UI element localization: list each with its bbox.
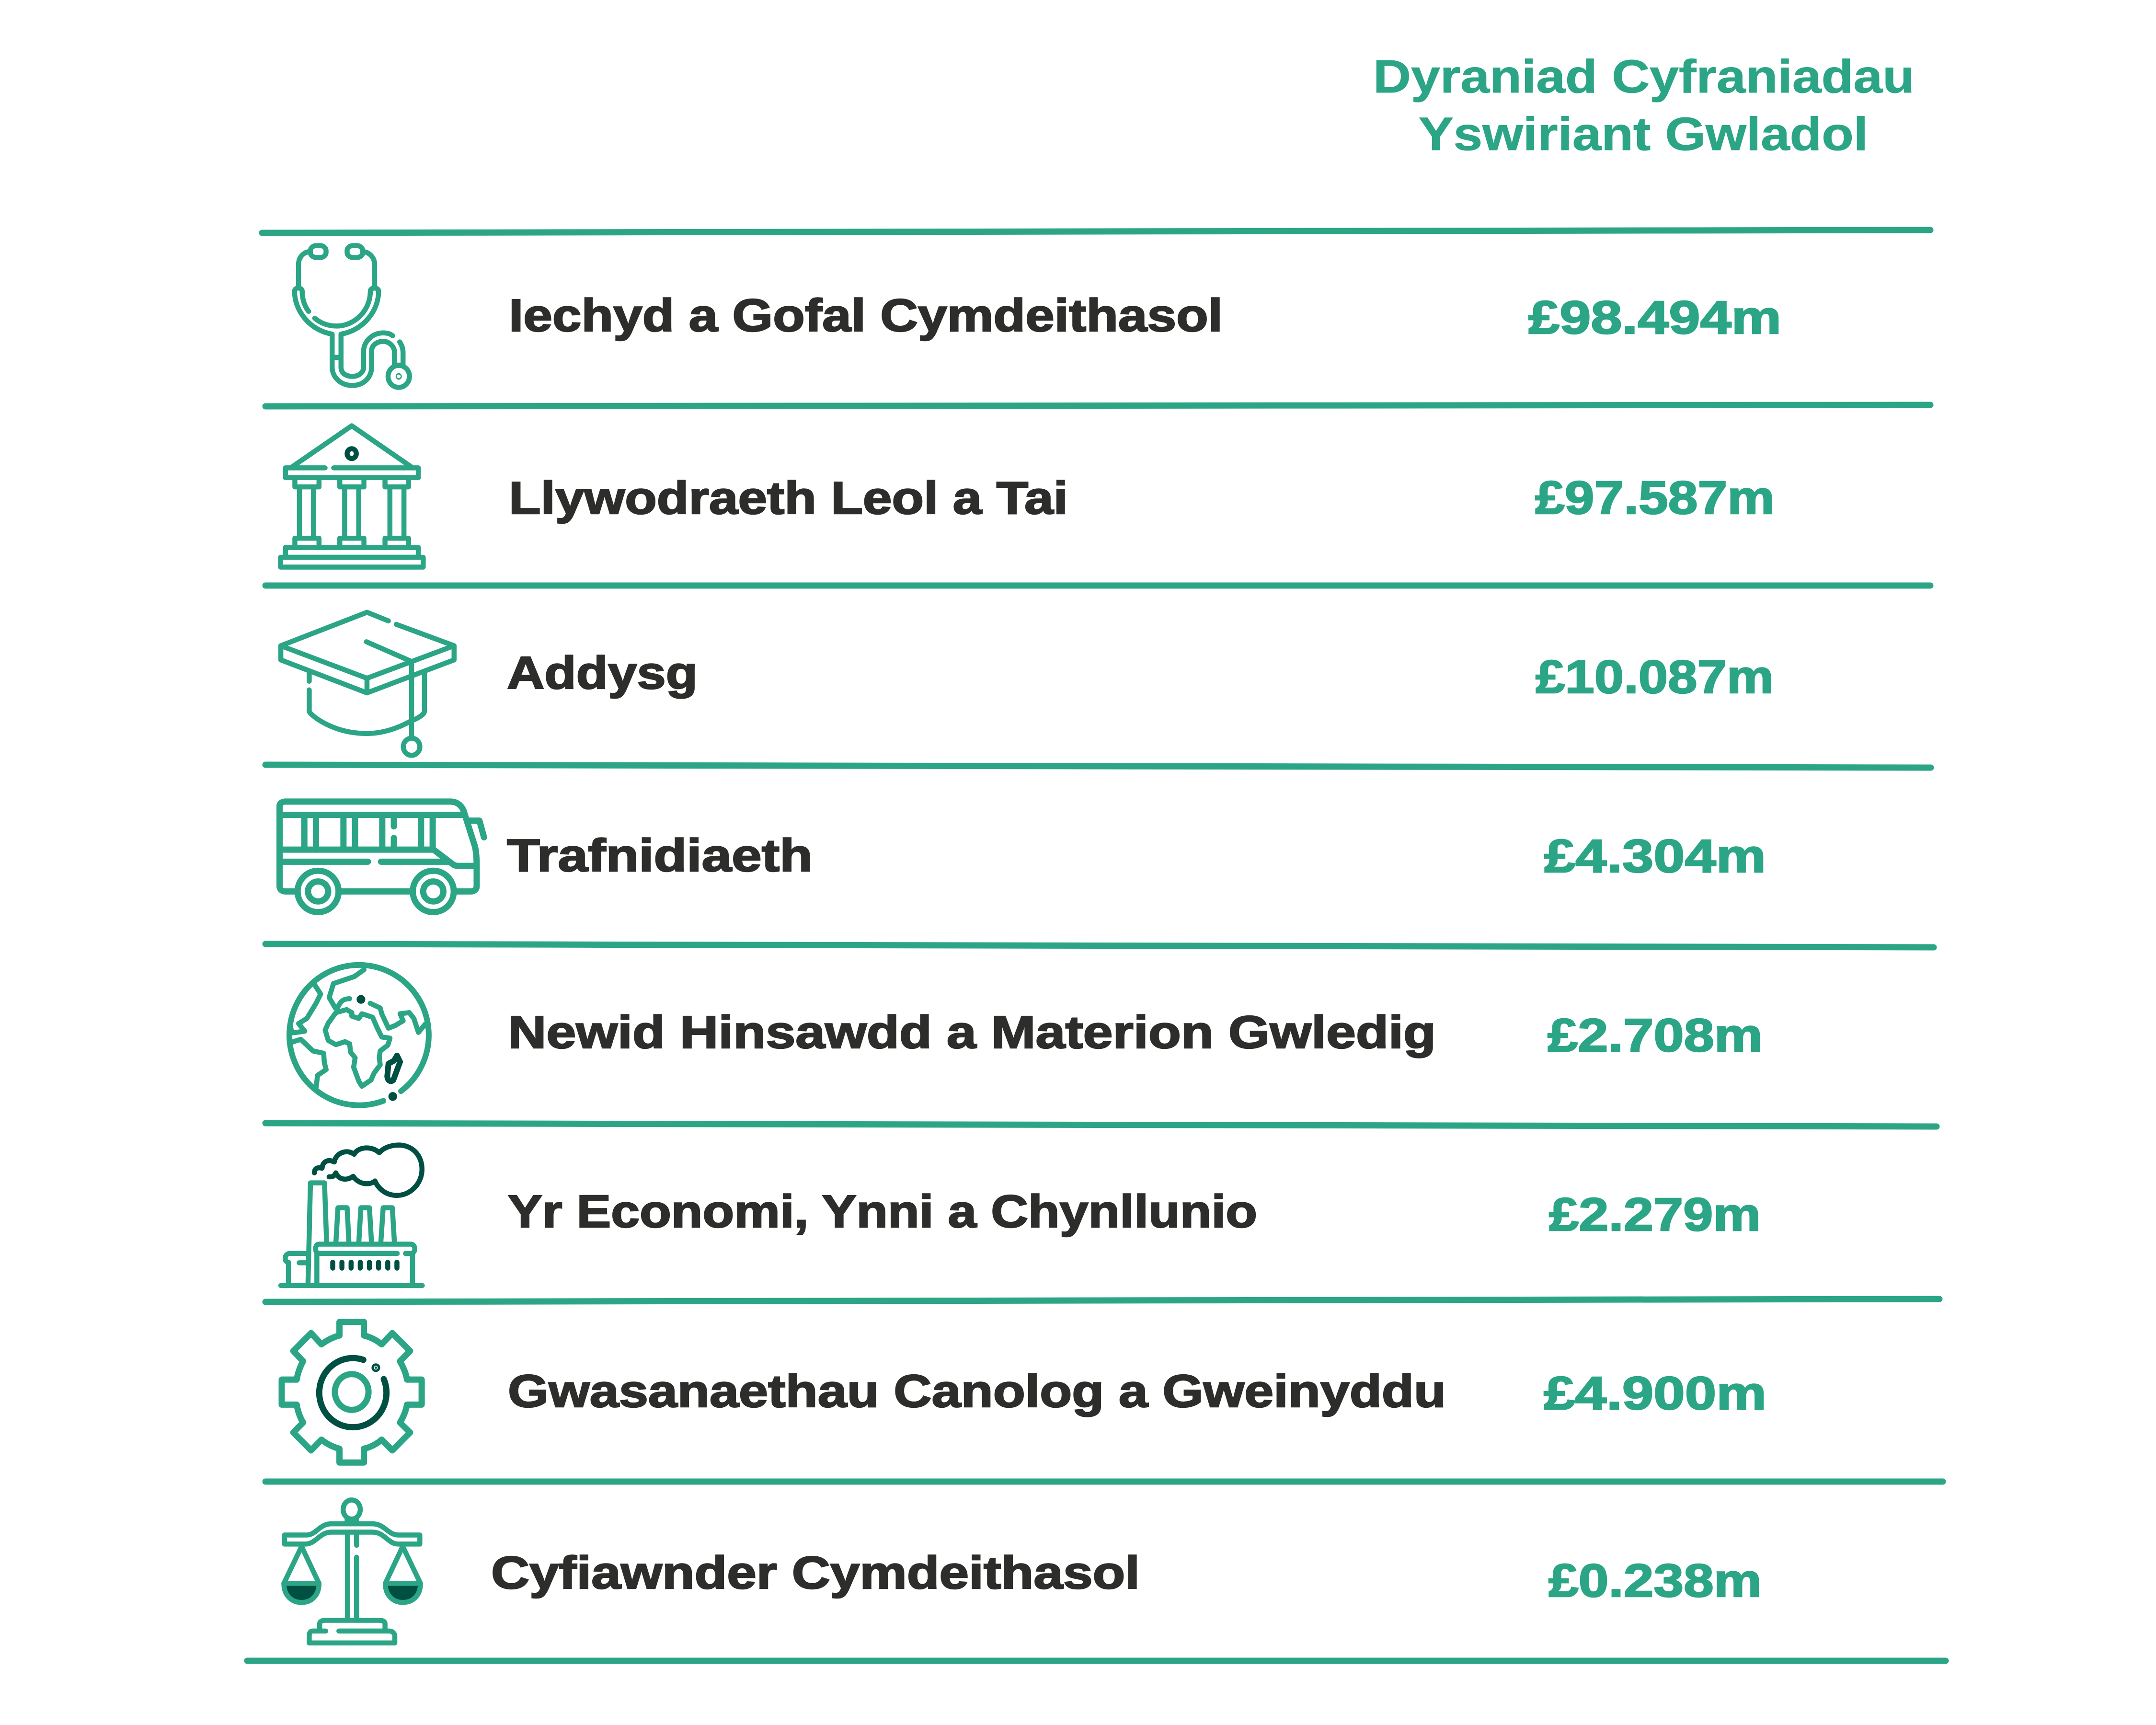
row: climate change and rural affairs [289, 965, 1763, 1105]
row: economy, energy and planning [281, 1145, 1761, 1286]
row: central services and administration [282, 1322, 1766, 1462]
icon: graduation cap [281, 612, 454, 755]
value: £10.087m: £10.087m [1536, 651, 1774, 703]
icon: bus [280, 802, 484, 912]
value: £97.587m: £97.587m [1535, 472, 1775, 524]
icon: stethoscope [295, 246, 410, 387]
label: Addysg: Addysg [507, 647, 698, 699]
row: local government and housing [280, 426, 1775, 567]
label: Yr Economi, Ynni a Chynllunio: Yr Economi, Ynni a Chynllunio [508, 1186, 1257, 1237]
row: social justice [284, 1500, 1762, 1643]
icon: balance scales [284, 1500, 421, 1643]
row: health and social care [295, 246, 1781, 387]
row: transport [280, 802, 1766, 912]
value: £2.279m: £2.279m [1549, 1188, 1761, 1241]
label: Cyfiawnder Cymdeithasol: Cyfiawnder Cymdeithasol [491, 1547, 1140, 1598]
heading: column title: Yswiriant Gwladol [1419, 108, 1868, 160]
label: Iechyd a Gofal Cymdeithasol: Iechyd a Gofal Cymdeithasol [509, 290, 1223, 341]
icon: globe [289, 965, 429, 1105]
icon: civic building [280, 426, 423, 567]
row: education [281, 612, 1774, 755]
label: Llywodraeth Leol a Tai: Llywodraeth Leol a Tai [509, 472, 1068, 524]
icon: factory [281, 1145, 422, 1286]
heading: column title [1373, 50, 1915, 160]
label: Gwasanaethau Canolog a Gweinyddu: Gwasanaethau Canolog a Gweinyddu [508, 1366, 1446, 1417]
icon: gear [282, 1322, 422, 1462]
heading: column title: Dyraniad Cyfraniadau [1373, 50, 1915, 103]
value: £2.708m: £2.708m [1548, 1009, 1763, 1061]
value: £4.304m: £4.304m [1544, 830, 1766, 882]
label: Trafnidiaeth: Trafnidiaeth [507, 830, 813, 881]
label: Newid Hinsawdd a Materion Gwledig: Newid Hinsawdd a Materion Gwledig [508, 1007, 1436, 1058]
value: £98.494m: £98.494m [1528, 291, 1781, 344]
value: £4.900m: £4.900m [1544, 1367, 1766, 1419]
value: £0.238m: £0.238m [1548, 1554, 1762, 1607]
